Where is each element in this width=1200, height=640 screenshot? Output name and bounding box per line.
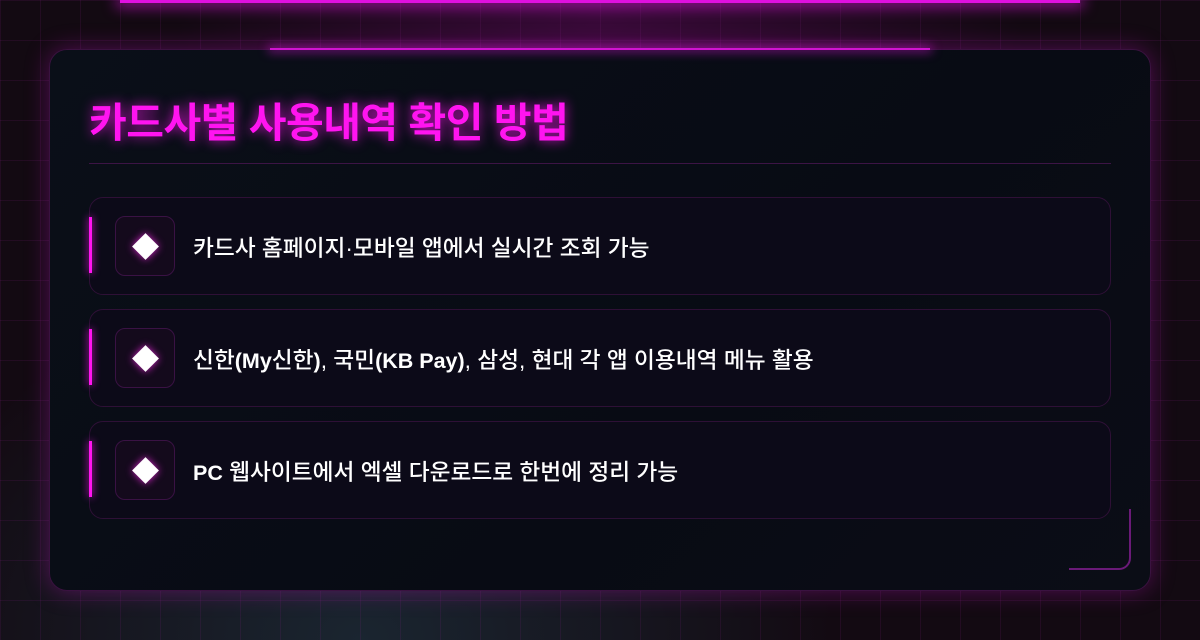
icon: diamond bbox=[115, 440, 175, 500]
item 2 bbox=[89, 309, 1111, 407]
icon: diamond bbox=[115, 216, 175, 276]
title: 카드사별 사용내역 확인 방법 bbox=[89, 100, 568, 146]
top glow line bbox=[120, 0, 1080, 3]
item 3 bbox=[89, 421, 1111, 519]
text 2: 신한(My신한), 국민(KB Pay), 삼성, 현대 각 앱 이용내역 메뉴 활용 bbox=[193, 347, 814, 373]
text 1: 카드사 홈페이지·모바일 앱에서 실시간 조회 가능 bbox=[193, 235, 650, 261]
corner accent bbox=[1069, 509, 1131, 570]
item 1 bbox=[89, 197, 1111, 295]
icon: diamond bbox=[115, 328, 175, 388]
text 3: PC 웹사이트에서 엑셀 다운로드로 한번에 정리 가능 bbox=[193, 459, 678, 485]
panel: main card bbox=[49, 49, 1151, 591]
